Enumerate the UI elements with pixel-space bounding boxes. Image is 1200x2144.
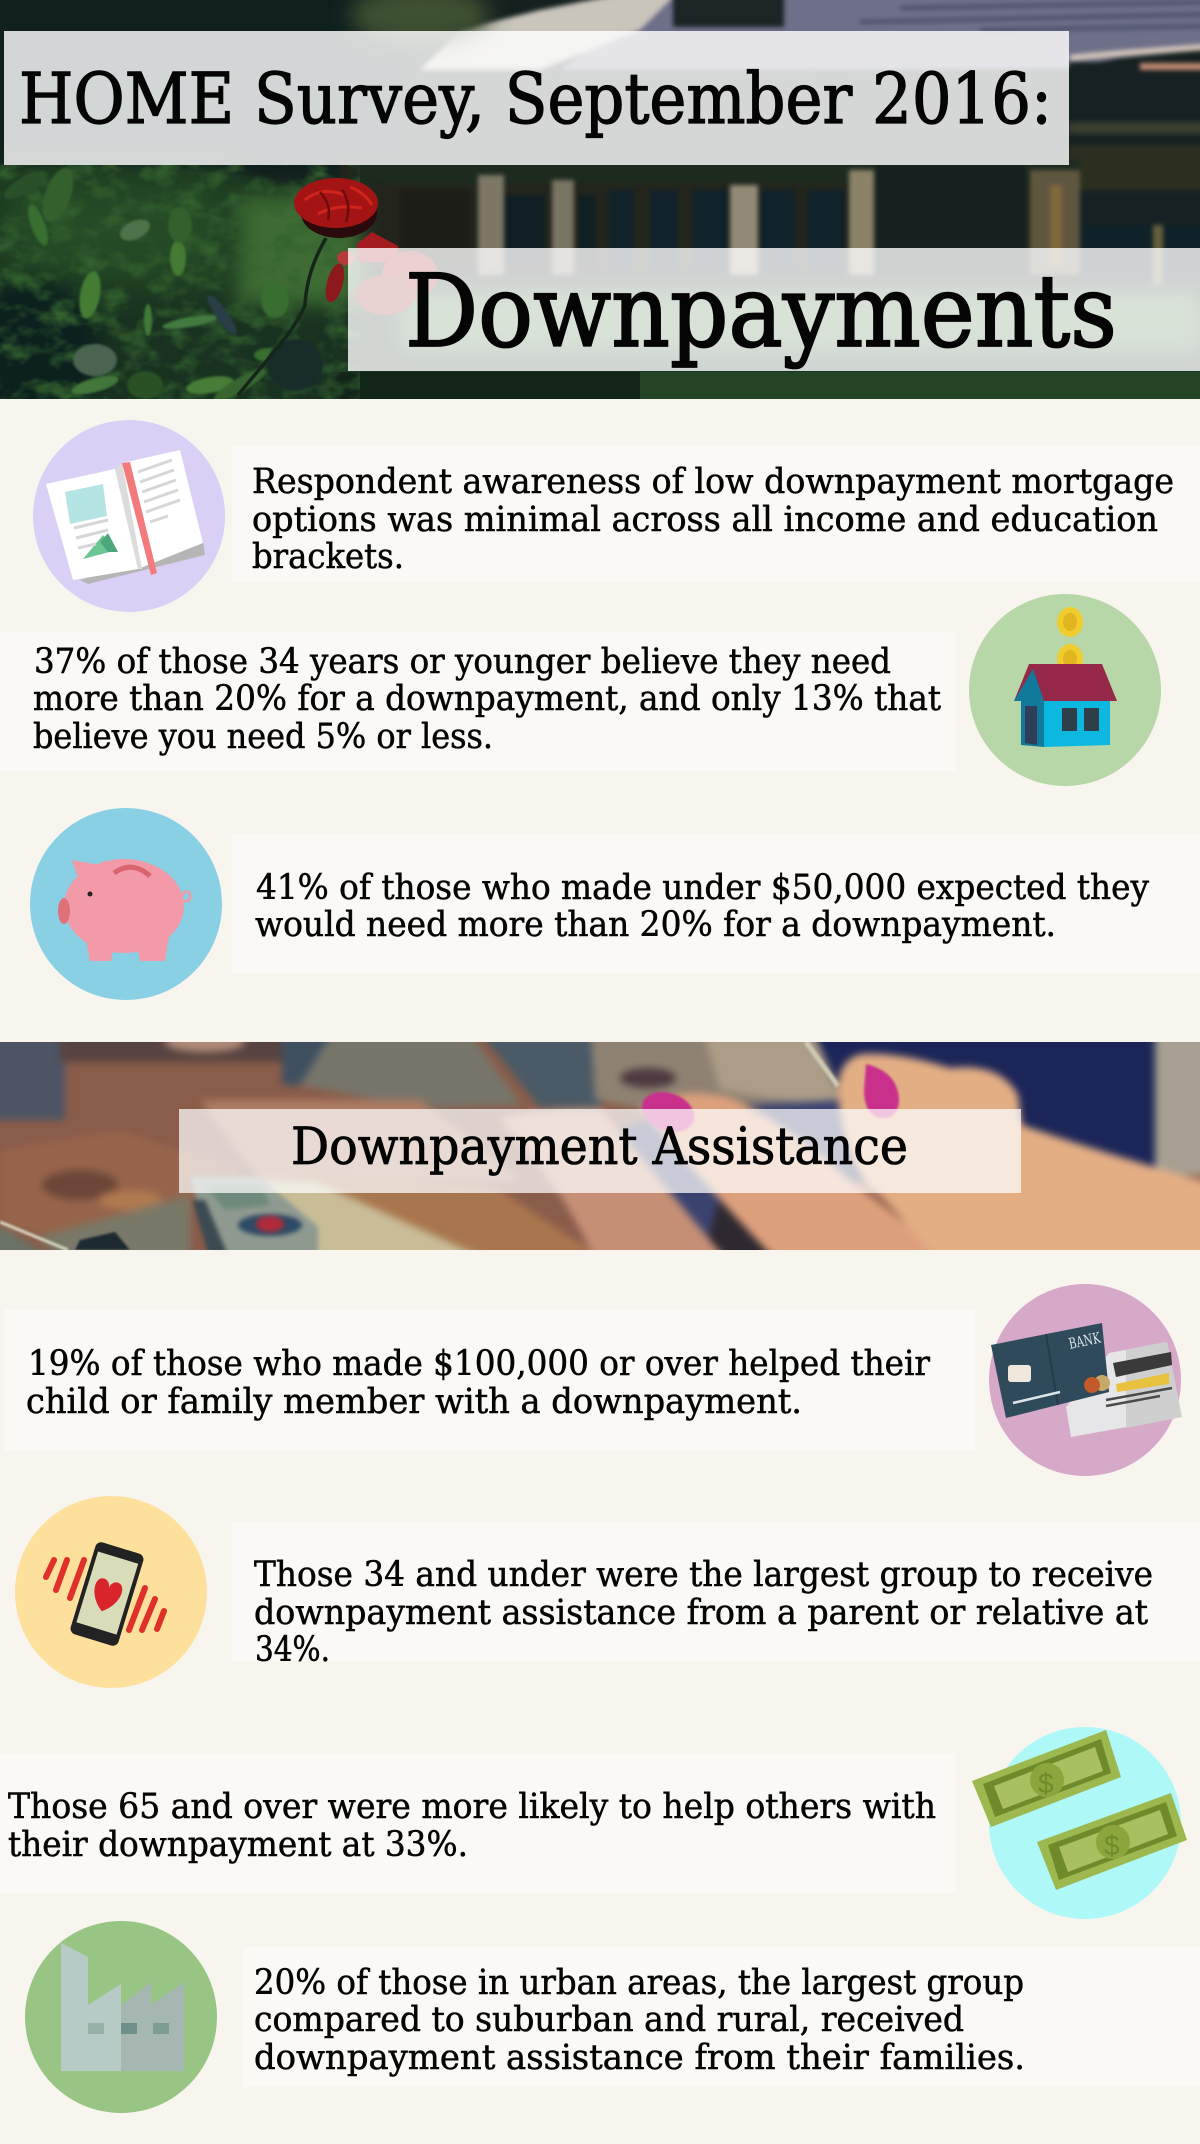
lower finger bbox=[504, 1104, 726, 1250]
hedge base bbox=[0, 165, 1200, 420]
text: age belief: believe you need 5% or less. bbox=[33, 717, 493, 757]
icon: dollar bills: $ bbox=[1038, 1768, 1054, 1799]
fingernails bbox=[636, 1064, 899, 1139]
text: income expectation bbox=[255, 868, 1149, 945]
foliage leaves bbox=[0, 164, 323, 406]
text: urban areas bbox=[254, 1963, 1025, 2078]
panel: age belief bbox=[0, 594, 1161, 786]
text: age belief: more than 20% for a downpayment, and only 13% that bbox=[33, 679, 941, 719]
panel: under 34 bbox=[15, 1496, 1200, 1688]
middle finger bbox=[638, 1088, 934, 1250]
panel: over 65 bbox=[0, 1727, 1187, 1919]
text: helping family: 19% of those who made $100,000 or over helped their bbox=[28, 1344, 931, 1384]
text: over 65: their downpayment at 33%. bbox=[8, 1825, 468, 1865]
icon: red rose bbox=[294, 178, 438, 315]
text: awareness: Respondent awareness of low downpayment mortgage bbox=[252, 462, 1174, 502]
icon: dollar bills: $ bbox=[1104, 1830, 1120, 1861]
text: over 65: Those 65 and over were more likely to help others with bbox=[8, 1787, 936, 1827]
text: awareness bbox=[252, 462, 1174, 577]
title banner: HOME Survey, September 2016: bbox=[19, 58, 1052, 140]
text: income expectation: 41% of those who made under $50,000 expected they bbox=[256, 868, 1149, 908]
text: income expectation: would need more than 20% for a downpayment. bbox=[255, 905, 1056, 945]
subtitle banner: Downpayments bbox=[405, 253, 1117, 370]
text: over 65 bbox=[8, 1787, 936, 1865]
thumb and wrist bbox=[838, 1054, 1200, 1270]
text: awareness: brackets. bbox=[252, 537, 404, 577]
text: urban areas: 20% of those in urban areas, the largest group bbox=[254, 1963, 1024, 2003]
text: awareness: options was minimal across all income and education bbox=[252, 500, 1158, 540]
text: urban areas: downpayment assistance from their families. bbox=[254, 2038, 1025, 2078]
panel: awareness bbox=[33, 420, 1200, 612]
shadow behind fingers bbox=[620, 1095, 845, 1240]
text: under 34: downpayment assistance from a parent or relative at bbox=[254, 1593, 1148, 1633]
panel: income expectation bbox=[30, 808, 1200, 1000]
icon: open book bbox=[33, 420, 225, 612]
text: urban areas: compared to suburban and rural, received bbox=[254, 2000, 964, 2040]
text: helping family: child or family member with a downpayment. bbox=[26, 1382, 802, 1422]
icon: house with coins bbox=[969, 594, 1161, 786]
section heading banner bbox=[179, 1109, 1021, 1193]
panel: helping family bbox=[4, 1284, 1182, 1476]
section heading banner: Downpayment Assistance bbox=[291, 1118, 908, 1177]
text: age belief bbox=[33, 642, 941, 757]
icon: piggy bank bbox=[30, 808, 222, 1000]
text: under 34: Those 34 and under were the largest group to receive bbox=[254, 1555, 1153, 1595]
title banner bbox=[4, 31, 1069, 165]
bank label: BANK bbox=[1067, 1329, 1103, 1353]
text: age belief: 37% of those 34 years or younger believe they need bbox=[34, 642, 891, 682]
header photo: house and rose bush bbox=[0, 0, 1200, 420]
text: under 34: 34%. bbox=[255, 1630, 330, 1670]
text: helping family bbox=[26, 1344, 931, 1422]
icon: bank cards bbox=[989, 1284, 1182, 1476]
text: under 34 bbox=[254, 1555, 1153, 1670]
icon: factory bbox=[25, 1921, 217, 2113]
car key object bbox=[191, 1177, 318, 1260]
panel: urban areas bbox=[25, 1921, 1200, 2113]
section photo: hand holding phone bbox=[0, 1042, 1200, 1250]
icon: phone with heart bbox=[15, 1496, 207, 1688]
icon: dollar bills bbox=[972, 1727, 1187, 1919]
